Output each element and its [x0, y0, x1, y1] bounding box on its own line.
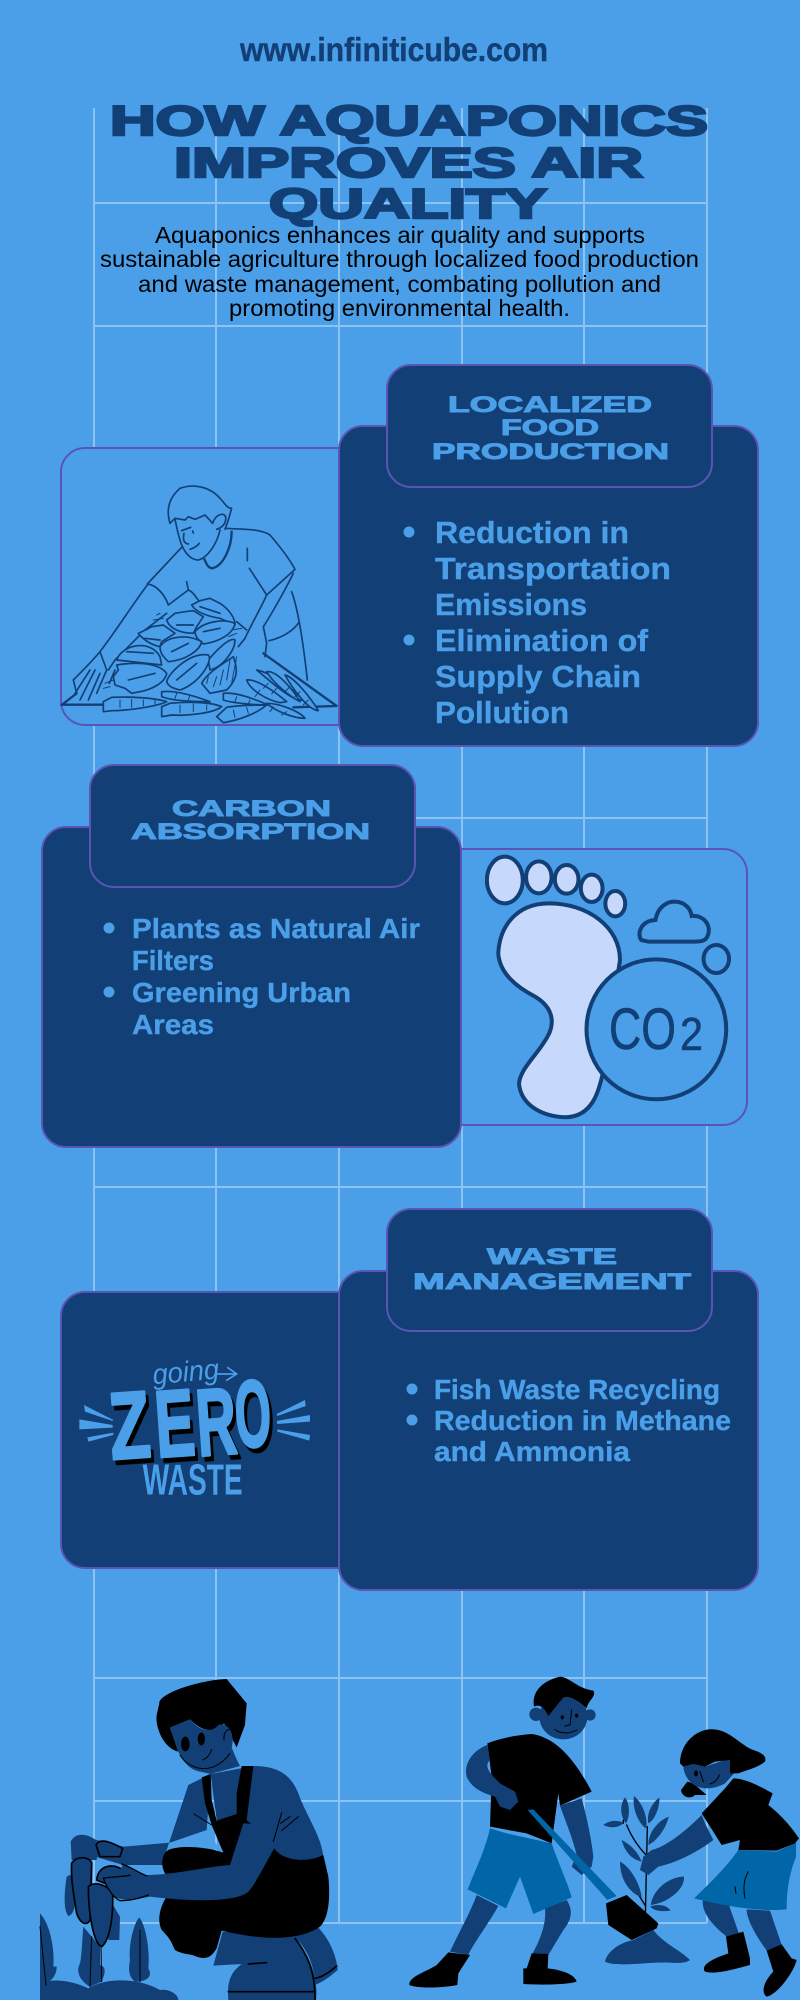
heading tab: localized food production: PRODUCTION — [432, 439, 669, 464]
icon: going zero waste lettering: WASTE — [143, 1457, 243, 1505]
heading tab: waste management: WASTE — [487, 1244, 617, 1269]
card: localized food production bullets — [339, 426, 758, 746]
heading tab: localized food production: LOCALIZED — [448, 392, 652, 417]
bullet list: Pollution — [435, 695, 569, 730]
image card: farmer with vegetables — [61, 448, 361, 725]
panel: localized food production — [61, 365, 758, 746]
girl — [640, 1729, 799, 1997]
bullet list: Reduction in — [435, 515, 629, 550]
title: IMPROVES AIR — [174, 139, 643, 186]
card: carbon absorption bullets — [42, 827, 461, 1147]
bullet list: Supply Chain — [435, 659, 641, 694]
icon: going zero waste lettering: Z — [106, 1372, 154, 1480]
bullet list — [404, 515, 671, 730]
intro paragraph: promoting environmental health. — [229, 295, 570, 321]
bullet list: Greening Urban — [132, 977, 351, 1008]
title — [110, 97, 708, 227]
intro paragraph — [100, 222, 699, 321]
image card: carbon footprint — [440, 849, 747, 1125]
image card: going zero waste — [61, 1292, 361, 1568]
bullet list: Fish Waste Recycling — [434, 1374, 720, 1405]
bullet list: Emissions — [435, 587, 587, 622]
heading tab: carbon absorption — [90, 765, 415, 887]
panel: carbon absorption — [42, 765, 747, 1147]
boy — [409, 1677, 658, 1987]
title: HOW AQUAPONICS — [110, 97, 708, 144]
soil mound — [605, 1930, 690, 1964]
icon: going zero waste lettering: O — [232, 1361, 274, 1468]
icon: farmer line art — [62, 486, 337, 723]
heading tab: localized food production: FOOD — [501, 415, 599, 440]
icon: going zero waste lettering — [79, 1354, 310, 1505]
bullet list — [104, 913, 420, 1040]
heading tab: carbon absorption: CARBON — [172, 796, 331, 821]
bullet list: Transportation — [435, 551, 671, 586]
bullet list: Areas — [132, 1009, 214, 1040]
bullet list: Elimination of — [435, 623, 649, 658]
heading tab: localized food production — [387, 365, 712, 487]
bullet list: Filters — [132, 945, 214, 976]
illustration: children planting a tree — [409, 1677, 799, 1997]
panel: waste management — [61, 1209, 758, 1590]
heading tab: waste management: MANAGEMENT — [413, 1269, 691, 1294]
icon: CO2 footprint — [487, 857, 729, 1117]
CO2 label: CO — [609, 997, 676, 1062]
bullet list: Reduction in Methane — [434, 1405, 731, 1436]
heading tab: carbon absorption: ABSORPTION — [131, 819, 370, 844]
intro paragraph: sustainable agriculture through localized food production — [100, 246, 699, 272]
icon: going zero waste lettering: going — [151, 1354, 220, 1391]
title: QUALITY — [269, 180, 547, 227]
bullet list: and Ammonia — [434, 1436, 631, 1467]
illustration: gardener holding carrots — [40, 1679, 338, 2000]
intro paragraph: and waste management, combating pollution and — [138, 271, 661, 297]
icon: going zero waste lettering: R — [193, 1368, 240, 1477]
bullet list: Plants as Natural Air — [132, 913, 420, 944]
CO2 label: 2 — [680, 1008, 703, 1060]
bullet list — [406, 1374, 731, 1467]
website url: www.infiniticube.com — [239, 31, 548, 68]
intro paragraph: Aquaponics enhances air quality and supports — [155, 222, 645, 248]
heading tab: waste management — [387, 1209, 712, 1331]
card: waste management bullets — [339, 1271, 758, 1590]
icon: going zero waste lettering: E — [151, 1370, 198, 1478]
sapling — [603, 1796, 684, 1932]
